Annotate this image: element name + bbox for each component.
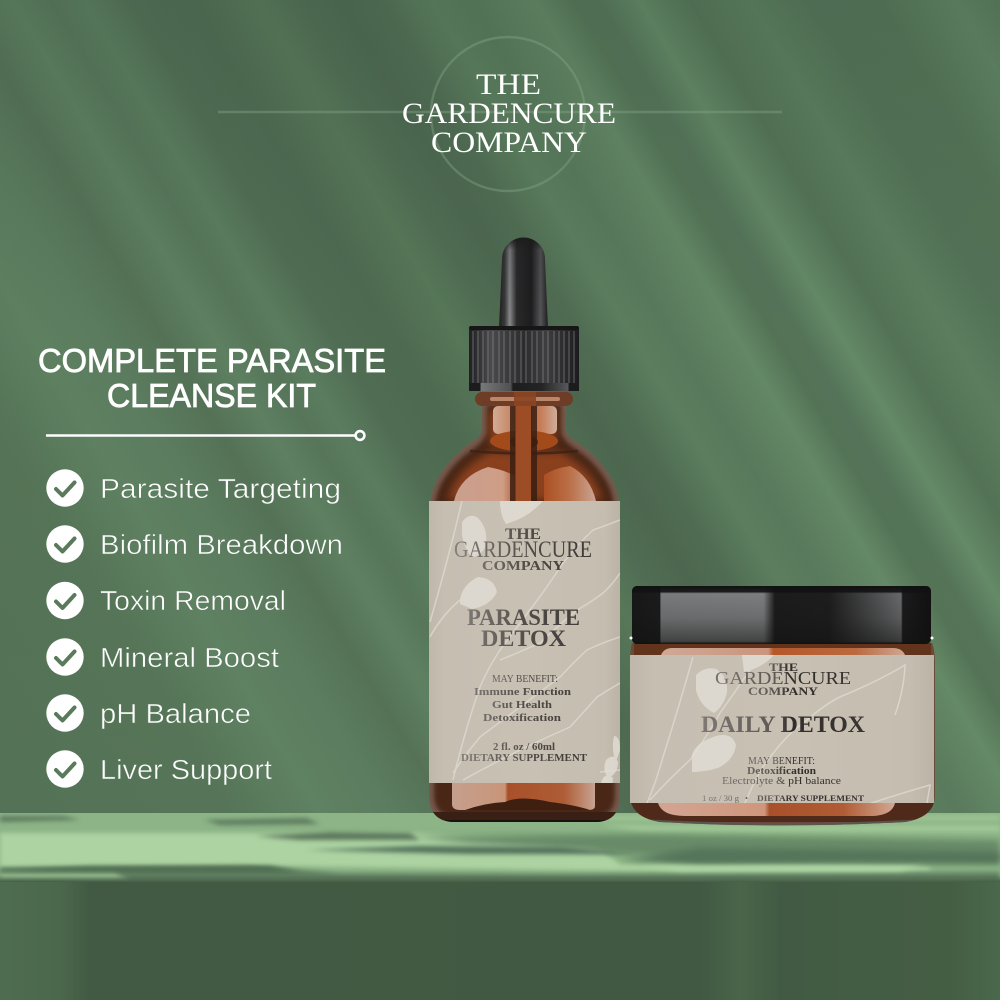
jar size and supplement line: 1 oz / 30 g	[702, 793, 740, 803]
jar label wordmark: THE	[769, 660, 798, 674]
jar benefits: MAY BENEFIT:	[748, 756, 815, 767]
jar size and supplement line: DIETARY SUPPLEMENT	[757, 793, 864, 803]
neck ring	[475, 392, 573, 406]
heading: Complete Parasite Cleanse Kit	[38, 342, 386, 414]
product: Parasite Detox dropper bottle	[429, 238, 620, 822]
jar label wordmark: GARDENCURE	[715, 668, 851, 688]
logo wordmark: THE	[476, 68, 541, 101]
item: Biofilm Breakdown	[46, 525, 343, 563]
orange base of neck	[490, 430, 558, 452]
jar label wordmark: COMPANY	[748, 684, 818, 698]
benefits checklist	[46, 469, 343, 788]
item: Liver Support	[46, 750, 272, 788]
bottle benefits: Detoxification	[483, 713, 561, 724]
dropper glass tube	[510, 406, 537, 501]
logo wordmark: COMPANY	[431, 126, 587, 159]
bottle label wordmark	[454, 526, 592, 574]
jar benefits	[722, 756, 842, 787]
item: Mineral Boost: Mineral Boost	[100, 642, 279, 673]
logo wordmark	[402, 68, 616, 159]
jar collar highlight	[661, 648, 905, 655]
jar size and supplement line: •	[745, 793, 748, 803]
jar black lid	[630, 586, 934, 644]
bottle benefits: Immune Function	[474, 687, 571, 698]
jar label	[630, 655, 934, 808]
jar label wordmark	[715, 660, 851, 698]
item: Liver Support: Liver Support	[100, 754, 272, 785]
shoulder reflection domes	[454, 467, 515, 501]
bottle label	[429, 501, 620, 790]
item: pH Balance	[46, 694, 251, 732]
heading: Complete Parasite Cleanse Kit: COMPLETE PARASITE	[38, 342, 386, 379]
product: Daily Detox jar	[630, 586, 935, 826]
neck inner highlight	[493, 406, 557, 434]
bottle label wordmark: COMPANY	[482, 559, 564, 574]
item: Parasite Targeting: Parasite Targeting	[100, 473, 341, 504]
dropper collar	[469, 326, 579, 391]
bottle label leaf art	[430, 501, 620, 790]
bottle base window	[452, 783, 595, 810]
bottle size and supplement line	[461, 742, 587, 764]
item: Parasite Targeting	[46, 469, 341, 507]
jar benefits: Detoxification	[747, 766, 816, 777]
bottle benefits: MAY BENEFIT:	[492, 674, 558, 685]
jar label leaf art	[647, 655, 930, 808]
item: pH Balance: pH Balance	[100, 698, 251, 729]
bottle size and supplement line: DIETARY SUPPLEMENT	[461, 753, 587, 764]
shelf surface with leaf shadows	[0, 813, 1000, 882]
bottle label wordmark: THE	[505, 526, 541, 543]
bottle product name	[467, 605, 580, 651]
bottle product name: DETOX	[481, 626, 566, 651]
amber glass body	[429, 392, 620, 822]
item: Toxin Removal: Toxin Removal	[100, 585, 286, 616]
bottle size and supplement line: 2 fl. oz / 60ml	[493, 742, 555, 753]
dropper bulb	[499, 238, 548, 328]
jar product name: DAILY DETOX	[701, 712, 865, 737]
bottle benefits: Gut Health	[492, 700, 552, 711]
logo: The Gardencure Company	[218, 37, 782, 191]
bottle label wordmark: GARDENCURE	[454, 537, 592, 562]
item: Mineral Boost	[46, 638, 279, 676]
floor front face	[0, 882, 1000, 1000]
jar size and supplement line	[702, 793, 864, 803]
heading rule with ring end	[46, 431, 364, 440]
heading: Complete Parasite Cleanse Kit: CLEANSE KIT	[107, 377, 316, 414]
jar base window	[630, 803, 934, 822]
bottle benefits	[474, 674, 571, 724]
item: Biofilm Breakdown: Biofilm Breakdown	[100, 529, 343, 560]
item: Toxin Removal	[46, 582, 286, 619]
logo ring and rule	[218, 37, 782, 191]
jar benefits: Electrolyte & pH balance	[722, 776, 842, 787]
bottle product name: PARASITE	[467, 605, 580, 630]
logo wordmark: GARDENCURE	[402, 97, 616, 130]
jar amber body	[630, 643, 935, 826]
